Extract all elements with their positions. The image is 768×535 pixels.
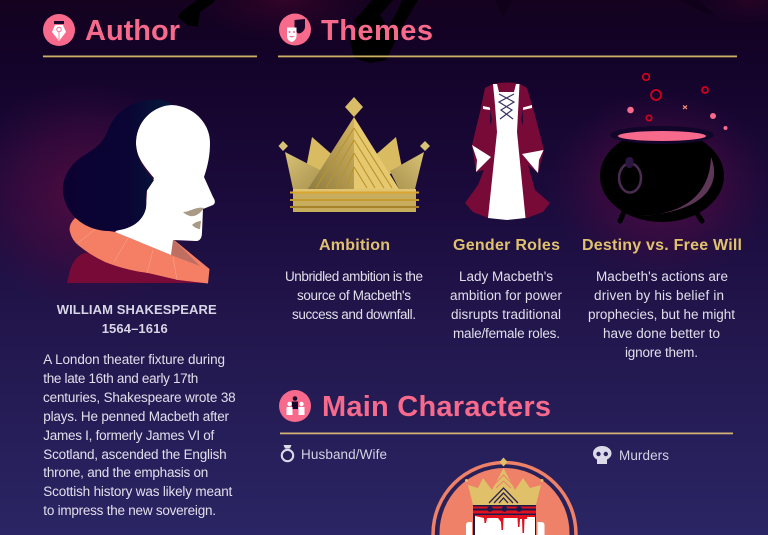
author biography: Scotland, ascended the English xyxy=(43,447,227,462)
illustration: dress xyxy=(465,82,550,220)
theme: destiny vs. free will: ignore them. xyxy=(625,345,698,360)
panel: themes xyxy=(278,14,742,360)
theme: gender roles: male/female roles. xyxy=(453,326,560,341)
theme: destiny vs. free will: Destiny vs. Free Will xyxy=(582,237,742,254)
theme: ambition: source of Macbeth's xyxy=(297,288,411,303)
author biography: throne, and the emphasis on xyxy=(43,465,208,480)
author name and dates: WILLIAM SHAKESPEARE xyxy=(57,302,217,317)
legend: murders: Murders xyxy=(619,448,669,463)
panel: author xyxy=(43,14,257,518)
heading: themes: Themes xyxy=(321,15,433,47)
theme: ambition: Unbridled ambition is the xyxy=(285,269,423,284)
theme: ambition: Ambition xyxy=(319,237,390,254)
heading: themes xyxy=(278,14,737,57)
theme: ambition xyxy=(285,237,423,322)
author biography: the late 16th and early 17th xyxy=(43,371,198,386)
author biography: Scottish history was likely meant xyxy=(43,484,233,499)
author name and dates: 1564–1616 xyxy=(102,321,168,336)
author name and dates xyxy=(57,302,217,336)
icon: people xyxy=(279,390,311,422)
theme: destiny vs. free will: have done better to xyxy=(603,326,720,341)
icon: theatre masks xyxy=(279,14,311,46)
legend: husband/wife: Husband/Wife xyxy=(301,447,387,462)
author biography: plays. He penned Macbeth after xyxy=(43,409,229,424)
illustration: crown xyxy=(278,97,430,212)
heading: author xyxy=(43,14,257,57)
heading: main characters xyxy=(279,390,733,434)
panel: main characters xyxy=(279,390,733,535)
theme: destiny vs. free will: driven by his belief in xyxy=(594,288,724,303)
author biography: James I, formerly James VI of xyxy=(43,428,215,443)
author biography: centuries, Shakespeare wrote 38 xyxy=(43,390,236,405)
theme: destiny vs. free will: Macbeth's actions are xyxy=(596,269,728,284)
illustration: cauldron with bubbles xyxy=(600,74,728,222)
theme: gender roles: Gender Roles xyxy=(453,237,560,254)
author biography xyxy=(43,352,236,518)
medallion: crowned king xyxy=(431,458,578,535)
theme: gender roles: ambition for power xyxy=(450,288,562,303)
heading: author: Author xyxy=(85,15,180,47)
theme: destiny vs. free will xyxy=(582,237,742,360)
theme: destiny vs. free will: prophecies, but he might xyxy=(588,307,735,322)
theme: ambition: success and downfall. xyxy=(292,307,416,322)
legend: murders xyxy=(593,446,669,464)
author biography: to impress the new sovereign. xyxy=(43,503,216,518)
heading: main characters: Main Characters xyxy=(322,391,551,423)
theme: gender roles xyxy=(450,237,562,341)
theme: gender roles: Lady Macbeth's xyxy=(459,269,553,284)
author biography: A London theater fixture during xyxy=(43,352,225,367)
portrait: William Shakespeare xyxy=(63,100,215,284)
icon: fountain pen nib xyxy=(43,14,75,46)
theme: gender roles: disrupts traditional xyxy=(451,307,561,322)
